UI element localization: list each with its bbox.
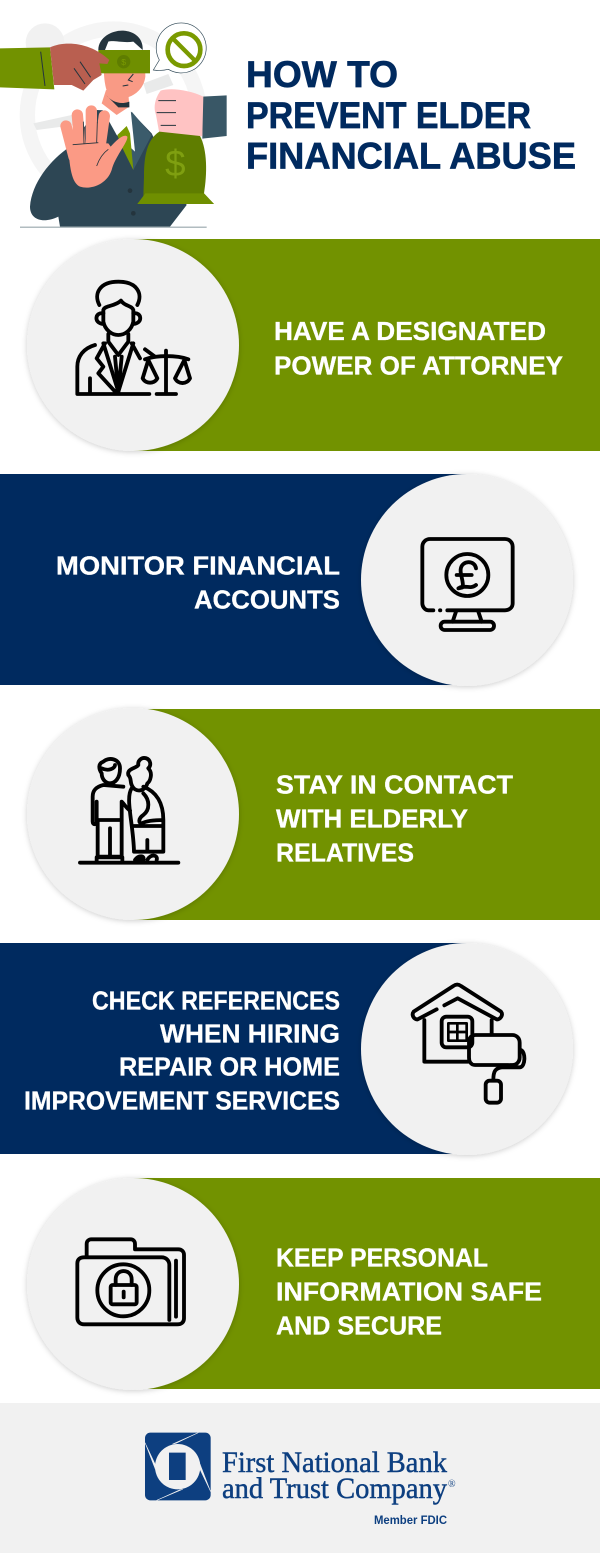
panel: stay in contact — [27, 708, 600, 920]
bank name: First National Bank — [222, 1446, 447, 1479]
panel text — [276, 770, 513, 868]
panel: monitor accounts — [0, 474, 573, 686]
panel text: RELATIVES — [276, 838, 414, 868]
bank name: ® — [448, 1479, 456, 1490]
title: PREVENT ELDER — [246, 95, 531, 136]
panel text — [274, 316, 563, 380]
bank name — [222, 1446, 456, 1505]
panel text: STAY IN CONTACT — [276, 770, 513, 800]
panel text: MONITOR FINANCIAL — [56, 550, 340, 580]
panel text: WHEN HIRING — [160, 1018, 340, 1048]
icon circle: house and paint roller — [361, 943, 573, 1155]
footer panel — [0, 1403, 600, 1553]
title: HOW TO — [246, 54, 398, 95]
panel: keep information safe — [27, 1178, 600, 1390]
panel text: AND SECURE — [276, 1310, 442, 1340]
panel text: IMPROVEMENT SERVICES — [24, 1086, 340, 1116]
stop hand — [66, 111, 127, 188]
bank name: and Trust Company — [222, 1472, 447, 1505]
icon circle: elderly couple — [27, 708, 239, 920]
icon circle: attorney with scales — [27, 239, 239, 451]
member fdic: Member FDIC — [374, 1513, 447, 1527]
illustration: man being robbed of money — [0, 23, 227, 228]
title — [246, 54, 576, 176]
panel text: HAVE A DESIGNATED — [274, 316, 546, 346]
panel: check references — [0, 943, 573, 1155]
panel text — [24, 986, 340, 1116]
icon circle: monitor with pound sign — [361, 474, 573, 686]
panel text: ACCOUNTS — [194, 584, 340, 614]
panel: power of attorney — [27, 239, 600, 451]
panel text: REPAIR OR HOME — [119, 1052, 340, 1082]
panel text: INFORMATION SAFE — [276, 1276, 542, 1306]
panel text — [56, 550, 340, 614]
logo mark — [145, 1433, 211, 1500]
icon circle: folder with padlock — [27, 1178, 239, 1390]
panel text: KEEP PERSONAL — [276, 1242, 488, 1272]
title: FINANCIAL ABUSE — [246, 136, 576, 176]
illustration: man being robbed of money: $ — [165, 143, 186, 184]
panel text: CHECK REFERENCES — [92, 986, 340, 1016]
panel text — [276, 1242, 542, 1340]
illustration: man being robbed of money: $ — [121, 57, 126, 67]
panel text: WITH ELDERLY — [276, 804, 468, 834]
panel text: POWER OF ATTORNEY — [274, 350, 563, 380]
